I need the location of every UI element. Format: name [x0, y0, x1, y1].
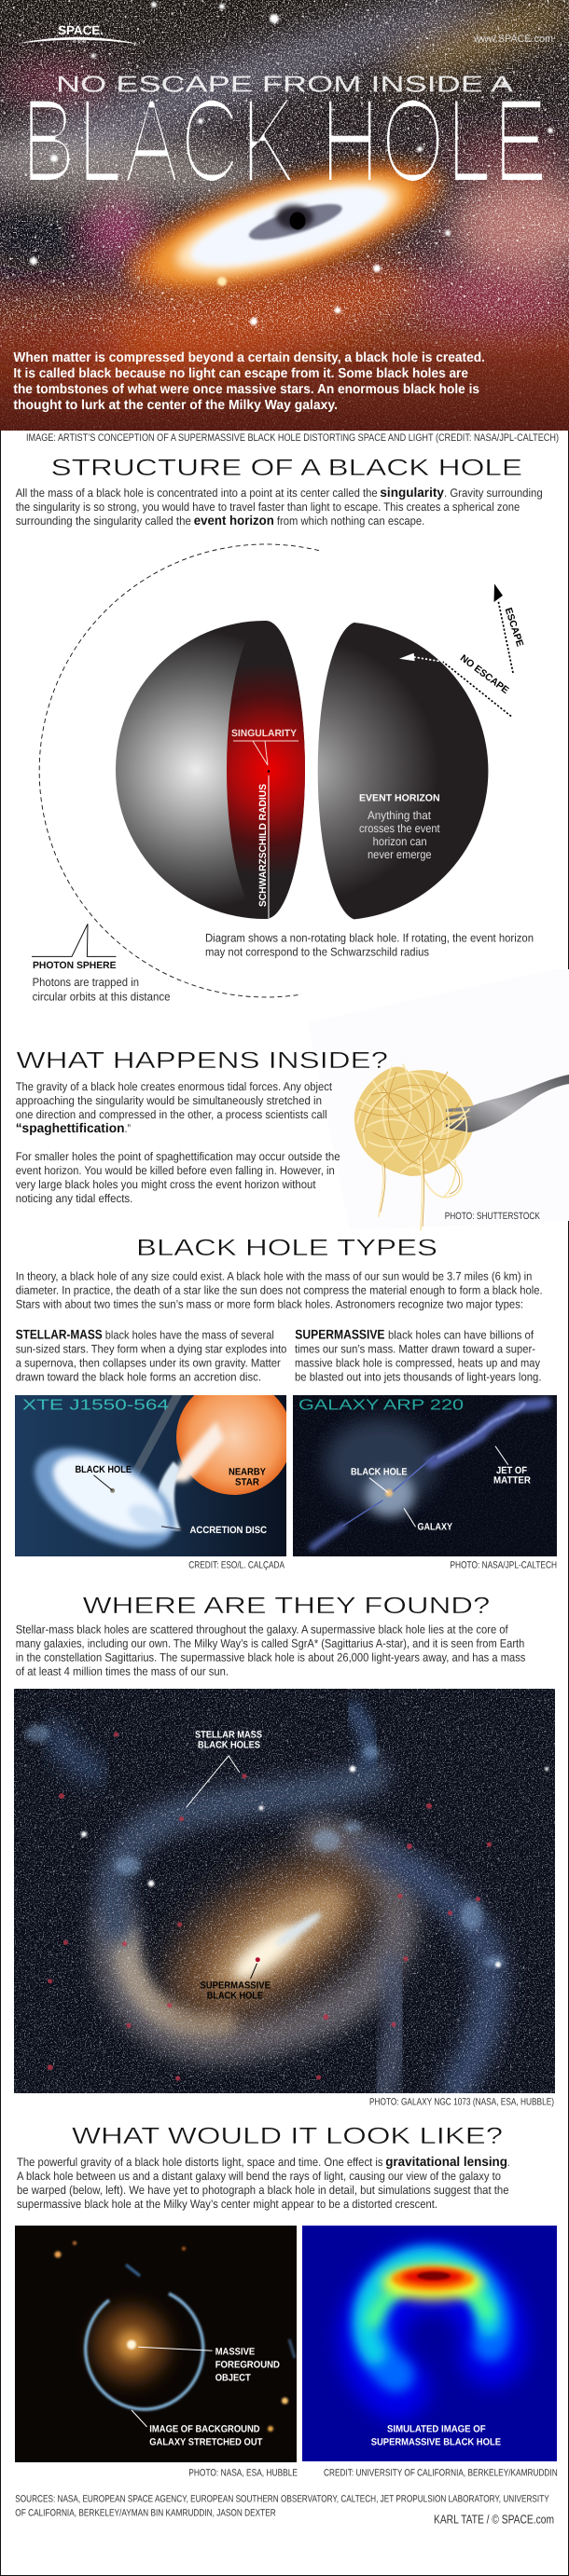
heading: where: WHERE ARE THEY FOUND? — [83, 1593, 490, 1619]
label: stellar mass black holes: STELLAR MASS — [195, 1729, 262, 1740]
jets — [312, 1403, 546, 1547]
singularity label: SINGULARITY — [231, 728, 297, 739]
image title: GALAXY ARP 220 — [298, 1398, 464, 1414]
accretion disc — [117, 149, 453, 303]
photon sphere label: Photons are trapped in — [33, 976, 139, 989]
inside paragraph 2 — [16, 1150, 340, 1205]
types paragraph — [16, 1269, 543, 1310]
inside paragraph 1: .” — [125, 1122, 131, 1135]
inside paragraph 1 — [16, 1080, 332, 1135]
where paragraph: of at least 4 million times the mass of our sun. — [16, 1665, 229, 1678]
label: simulated image — [371, 2423, 501, 2447]
image: simulated black hole — [302, 2226, 557, 2461]
event horizon label: EVENT HORIZON — [359, 792, 440, 803]
look like paragraph: . — [507, 2156, 510, 2169]
label: stellar mass black holes — [187, 1729, 262, 1807]
arrow: no escape: NO ESCAPE — [458, 652, 511, 696]
image: gravitational lens — [15, 2226, 297, 2462]
label: nearby star — [229, 1467, 266, 1488]
label: supermassive black hole: SUPERMASSIVE — [200, 1980, 271, 1991]
structure paragraph: singularity — [380, 485, 444, 500]
black hole — [289, 212, 306, 229]
heading: types: BLACK HOLE TYPES — [136, 1235, 437, 1261]
event horizon label: horizon can — [373, 835, 427, 848]
label: image of background galaxy — [132, 2410, 263, 2447]
supermassive description — [295, 1327, 541, 1384]
label: accretion disc — [161, 1525, 267, 1536]
event horizon label: never emerge — [368, 848, 432, 861]
inside paragraph 2: For smaller holes the point of spaghettification may occur outside the — [16, 1150, 340, 1163]
where paragraph — [16, 1623, 525, 1678]
photon sphere orbit — [39, 544, 319, 997]
label: jet of matter: MATTER — [493, 1475, 531, 1487]
supermassive description: times our sun’s mass. Matter drawn toward a super- — [295, 1343, 535, 1356]
inside paragraph 1: The gravity of a black hole creates enormous tidal forces. Any object — [16, 1080, 332, 1093]
structure paragraph: . Gravity surrounding — [444, 486, 543, 500]
look like paragraph: The powerful gravity of a black hole distorts light, space and time. One effect is — [17, 2156, 382, 2169]
image: galaxy arp 220 — [293, 1395, 557, 1556]
inside paragraph 2: event horizon. You would be killed before even falling in. However, in — [16, 1164, 335, 1177]
inside paragraph 2: noticing any tidal effects. — [16, 1192, 132, 1205]
arrow: no escape — [399, 652, 511, 717]
nearby star — [176, 1379, 292, 1495]
stellar-mass description: black holes have the mass of several — [105, 1329, 274, 1342]
label: nearby star: STAR — [235, 1477, 259, 1488]
star field — [0, 0, 569, 431]
spaghetti photo credit: PHOTO: SHUTTERSTOCK — [445, 1211, 540, 1222]
photon sphere label: circular orbits at this distance — [33, 990, 171, 1003]
sources — [15, 2494, 549, 2519]
panel: where are they found — [14, 1593, 555, 2107]
look like paragraph: gravitational lensing — [385, 2154, 507, 2169]
inside paragraph 1: “spaghettification — [16, 1120, 125, 1135]
foreground galaxy — [94, 2308, 169, 2382]
structure paragraph — [16, 485, 543, 528]
stellar mass markers — [48, 1732, 492, 2081]
supermassive description: be blasted out into jets thousands of light-years long. — [295, 1371, 541, 1384]
event horizon label: Anything that — [368, 809, 431, 822]
right hemisphere — [318, 623, 488, 919]
panel: what happens inside — [16, 969, 569, 1230]
image title: XTE J1550-564 — [22, 1398, 169, 1414]
stellar-mass description: drawn toward the black hole forms an accretion disc. — [16, 1371, 261, 1384]
look like paragraph: supermassive black hole at the Milky Way’s center might appear to be a distorted crescent. — [17, 2198, 437, 2211]
heading: what happens inside: WHAT HAPPENS INSIDE? — [17, 1048, 388, 1074]
arrow: escape: ESCAPE — [503, 607, 525, 648]
star field — [14, 1689, 555, 2093]
schwarzschild radius: SCHWARZSCHILD RADIUS — [257, 784, 269, 907]
panel: hero — [0, 0, 569, 431]
panel: what would it look like — [15, 2123, 558, 2479]
label: massive foreground object — [138, 2347, 280, 2384]
look like paragraph: A black hole between us and a distant galaxy will bend the rays of light, causing our view of the galaxy to — [17, 2170, 501, 2183]
label: black hole — [75, 1464, 132, 1490]
background stars — [54, 2241, 295, 2432]
intro text — [13, 350, 485, 413]
credit: eso: CREDIT: ESO/L. CALÇADA — [188, 1559, 284, 1570]
label: supermassive black hole — [200, 1957, 271, 2001]
intro text: It is called black because no light can escape from it. Some black holes are — [13, 366, 468, 381]
structure paragraph: All the mass of a black hole is concentrated into a point at its center called the — [16, 486, 378, 500]
singularity label — [231, 728, 298, 773]
label: simulated image: SUPERMASSIVE BLACK HOLE — [371, 2436, 501, 2447]
einstein ring — [86, 2294, 203, 2409]
star clusters — [25, 1725, 505, 1967]
black hole diagram — [32, 544, 534, 1003]
intro text: When matter is compressed beyond a certain density, a black hole is created. — [13, 350, 485, 365]
label: black hole: BLACK HOLE — [75, 1464, 132, 1475]
types paragraph: Stars with about two times the sun’s mass or more form black holes. Astronomers recognize two major types: — [16, 1297, 523, 1310]
photon sphere label: PHOTON SPHERE — [33, 960, 116, 971]
structure paragraph: surrounding the singularity called the — [16, 514, 191, 528]
label: massive foreground object: FOREGROUND — [215, 2360, 280, 2371]
supermassive description: massive black hole is compressed, heats up and may — [295, 1357, 541, 1370]
credit: nasa esa hubble: PHOTO: NASA, ESA, HUBBLE — [188, 2468, 298, 2479]
arrow: escape — [494, 583, 525, 673]
spiral arms — [56, 1710, 491, 2092]
image: xte j1550-564 — [15, 1379, 292, 1569]
stellar-mass description — [16, 1327, 286, 1384]
supermassive description: SUPERMASSIVE — [295, 1327, 384, 1342]
supermassive description: black holes can have billions of — [388, 1329, 534, 1342]
label: jet of matter — [493, 1446, 531, 1487]
galaxy glow — [325, 1418, 437, 1508]
panel: structure of a black hole — [16, 455, 543, 1003]
interior cross-section — [227, 621, 305, 919]
intro text: the tombstones of what were once massive stars. An enormous black hole is — [13, 382, 479, 397]
label: massive foreground object: MASSIVE — [215, 2347, 255, 2358]
image: galaxy ngc 1073 — [14, 1689, 555, 2093]
label: stellar mass black holes: BLACK HOLES — [198, 1739, 260, 1750]
heading: look like: WHAT WOULD IT LOOK LIKE? — [72, 2123, 503, 2149]
label: nearby star: NEARBY — [229, 1467, 266, 1478]
label: black hole: BLACK HOLE — [351, 1467, 408, 1478]
inside paragraph 2: very large black holes you might cross the event horizon without — [16, 1178, 316, 1191]
heading: structure: STRUCTURE OF A BLACK HOLE — [50, 455, 522, 481]
fork — [446, 1075, 569, 1132]
accretion disc — [19, 1427, 190, 1569]
inside paragraph 1: one direction and compressed in the other, a process scientists call — [16, 1108, 327, 1121]
label: black hole — [351, 1467, 408, 1493]
inside paragraph 1: approaching the singularity would be simultaneously stretched in — [16, 1094, 322, 1107]
label: simulated image: SIMULATED IMAGE OF — [387, 2423, 486, 2434]
diagram note — [205, 932, 534, 959]
stellar-mass description: STELLAR-MASS — [16, 1327, 103, 1342]
look like paragraph — [17, 2154, 510, 2211]
galaxy bar — [142, 1825, 399, 2052]
hero space image — [0, 0, 569, 431]
website url: www.SPACE.com — [473, 34, 553, 45]
sources: OF CALIFORNIA, BERKELEY/AYMAN BIN KAMRUDDIN, JASON DEXTER — [15, 2508, 276, 2519]
bright stars — [30, 2, 553, 325]
label: jet of matter: JET OF — [496, 1465, 528, 1476]
event horizon label: crosses the event — [359, 822, 440, 835]
look like paragraph: be warped (below, left). We have yet to photograph a black hole in detail, but simulations suggest that the — [17, 2184, 509, 2197]
label: image of background galaxy: GALAXY STRETCHED OUT — [149, 2436, 263, 2447]
structure paragraph: the singularity is so strong, you would have to travel faster than light to escape. This creates a spherical zone — [16, 500, 520, 514]
left hemisphere — [116, 621, 305, 919]
where paragraph: Stellar-mass black holes are scattered throughout the galaxy. A supermassive black hole lies at the core of — [16, 1623, 508, 1636]
label: supermassive black hole: BLACK HOLE — [207, 1990, 263, 2001]
crescent — [366, 2259, 494, 2388]
spaghetti photo — [308, 969, 569, 1230]
panel: black hole types — [15, 1235, 557, 1570]
stellar-mass description: a supernova, then collapses under its own gravity. Matter — [16, 1357, 281, 1370]
diagram note: Diagram shows a non-rotating black hole. If rotating, the event horizon — [205, 932, 534, 945]
intro text: thought to lurk at the center of the Milky Way galaxy. — [13, 398, 338, 413]
title line 1: NO ESCAPE FROM INSIDE A — [56, 72, 514, 97]
label: image of background galaxy: IMAGE OF BACKGROUND — [149, 2423, 260, 2434]
structure paragraph: from which nothing can escape. — [277, 514, 424, 528]
structure paragraph: event horizon — [194, 513, 274, 528]
diagram note: may not correspond to the Schwarzschild radius — [205, 946, 429, 959]
space.com logo: SPACE. — [58, 23, 104, 37]
event horizon label — [359, 792, 440, 861]
label: accretion disc: ACCRETION DISC — [190, 1525, 267, 1536]
photon sphere label — [32, 924, 171, 1003]
space.com logo — [17, 26, 142, 45]
label: galaxy: GALAXY — [418, 1522, 452, 1533]
stellar-mass description: sun-sized stars. They form when a dying star explodes into — [16, 1343, 286, 1356]
label: galaxy — [404, 1508, 452, 1533]
label: massive foreground object: OBJECT — [215, 2373, 251, 2384]
space.com logo: .COM — [70, 39, 87, 44]
